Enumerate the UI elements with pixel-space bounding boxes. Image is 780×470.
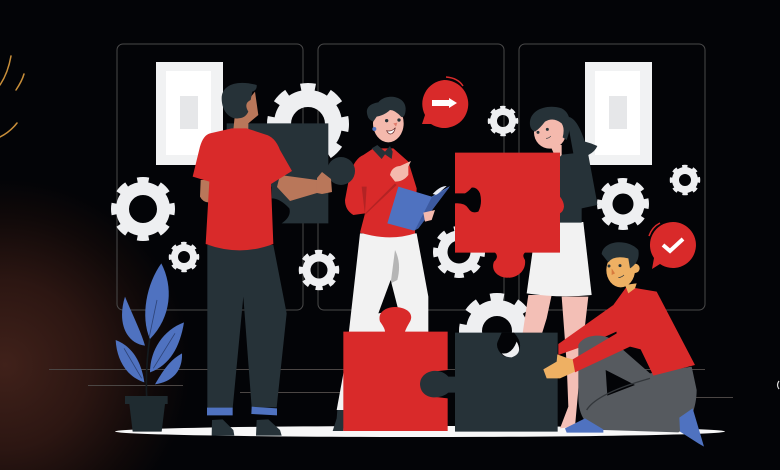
gear: top centre: [490, 108, 516, 134]
window: right: [585, 62, 652, 165]
gear: right small: [672, 166, 698, 194]
floor: [115, 426, 725, 437]
head: [606, 253, 635, 287]
gear: large left: [114, 180, 172, 238]
gear: small left: [170, 244, 198, 270]
hair: [222, 83, 257, 118]
earring and ear: [372, 127, 376, 131]
hair: [602, 242, 639, 268]
red puzzle piece: lifted: [455, 153, 564, 278]
shoe: front: [565, 418, 603, 433]
head: [373, 104, 404, 142]
book: [387, 186, 450, 231]
arms: [200, 175, 317, 202]
speech bubble: check: [649, 222, 696, 269]
shoes: [212, 419, 282, 436]
orange arcs: [0, 56, 24, 137]
figure: kneeling man: [543, 242, 704, 447]
gear: behind dark piece: [463, 297, 531, 365]
neck and face: [550, 145, 562, 160]
far arm: [558, 305, 620, 355]
pants: [578, 336, 697, 432]
edge mark: [778, 381, 779, 389]
hand: [543, 354, 575, 378]
neck: [625, 283, 637, 293]
collar: [372, 145, 393, 159]
hair: [367, 97, 406, 122]
speech bubble: arrow: [422, 77, 468, 128]
figure: woman legs and skirt: [522, 222, 592, 428]
background glow: [0, 170, 200, 470]
dark puzzle piece: floor: [420, 333, 558, 432]
head: [233, 92, 258, 130]
gear: behind man: [272, 88, 344, 160]
puzzle knob: held piece: [327, 157, 355, 185]
face details: [385, 118, 401, 134]
sweater: [572, 287, 695, 376]
gear: centre lower: [301, 252, 337, 288]
figure: man in red t-shirt: [193, 83, 317, 436]
gear: under red piece: [436, 229, 482, 275]
hand on book: [423, 210, 435, 222]
face details: [536, 128, 551, 138]
gear: right large: [600, 181, 646, 227]
window: left: [156, 62, 223, 165]
shirt: [193, 128, 292, 250]
legs: [333, 233, 428, 431]
cuffs: [207, 407, 277, 415]
shirt: [345, 148, 417, 237]
panel: left: [117, 44, 303, 310]
ponytail and jacket: [558, 117, 597, 223]
hand: man in red t-shirt: [317, 172, 332, 194]
hair: [530, 107, 570, 140]
face details: [607, 264, 624, 278]
shoe: back: [679, 408, 704, 447]
dark puzzle piece: held by man: [227, 123, 328, 223]
pants: [207, 245, 287, 408]
figure: woman upper body: [530, 107, 597, 223]
plant: [116, 263, 184, 432]
panel: right: [519, 44, 705, 310]
red puzzle piece: floor: [343, 307, 448, 431]
figure: man with book: [333, 97, 450, 431]
panel: centre: [318, 44, 504, 310]
pointing hand: [390, 161, 411, 182]
